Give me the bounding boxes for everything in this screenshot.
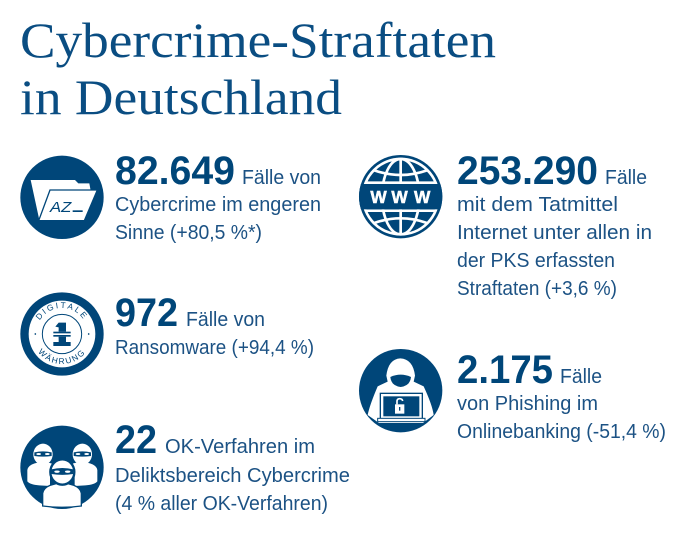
stat: 253.290 cases: Fälle bbox=[605, 167, 647, 189]
stat: 22 OK proceedings bbox=[115, 418, 350, 515]
title bbox=[20, 12, 496, 125]
icon: digital currency coin: WÄHRUNG bbox=[39, 348, 84, 364]
stat: 253.290 cases: der PKS erfassten bbox=[457, 250, 615, 272]
stat: 253.290 cases: 253.290 bbox=[457, 149, 598, 193]
stat: 22 OK proceedings: Deliktsbereich Cybercrime bbox=[115, 465, 350, 487]
stat: 82.649 cases: Cybercrime im engeren bbox=[115, 194, 321, 216]
icon: www globe: W bbox=[370, 187, 387, 207]
stat: 82.649 cases: 82.649 bbox=[115, 149, 235, 193]
stat: 22 OK proceedings: OK-Verfahren im bbox=[165, 436, 315, 458]
stat: 972 ransomware: 972 bbox=[115, 291, 178, 335]
stat: 2.175 phishing: von Phishing im bbox=[457, 393, 598, 415]
stat: 253.290 cases: Internet unter allen in bbox=[457, 222, 652, 244]
stat: 82.649 cases bbox=[115, 149, 321, 244]
stat: 2.175 phishing: Onlinebanking (-51,4 %) bbox=[457, 421, 666, 443]
stat: 82.649 cases: Sinne (+80,5 %*) bbox=[115, 222, 262, 244]
stat: 2.175 phishing: Fälle bbox=[560, 366, 602, 388]
icon: www globe: W bbox=[414, 187, 431, 207]
icon: www globe: W bbox=[391, 187, 408, 207]
stat: 253.290 cases: mit dem Tatmittel bbox=[457, 194, 618, 216]
title: in Deutschland bbox=[20, 69, 342, 125]
stat: 22 OK proceedings: (4 % aller OK-Verfahren) bbox=[115, 493, 328, 515]
stat: 972 ransomware bbox=[115, 291, 314, 359]
stat: 82.649 cases: Fälle von bbox=[242, 167, 321, 189]
icon: hacker with laptop bbox=[359, 349, 442, 432]
icon: digital currency coin bbox=[20, 292, 104, 376]
stat: 972 ransomware: Ransomware (+94,4 %) bbox=[115, 337, 314, 359]
icon: folder AZ: AZ bbox=[49, 200, 73, 216]
stat: 2.175 phishing: 2.175 bbox=[457, 348, 553, 392]
icon: masked group bbox=[20, 426, 104, 509]
stat: 253.290 cases: Straftaten (+3,6 %) bbox=[457, 278, 617, 300]
icon: digital currency coin: DIGITALE bbox=[36, 302, 88, 320]
stat: 22 OK proceedings: 22 bbox=[115, 418, 157, 462]
icon: www globe bbox=[358, 155, 443, 238]
stat: 972 ransomware: Fälle von bbox=[186, 309, 265, 331]
stat: 2.175 phishing bbox=[457, 348, 666, 443]
stat: 253.290 cases bbox=[457, 149, 652, 300]
title: Cybercrime-Straftaten bbox=[20, 12, 496, 68]
icon: folder AZ bbox=[20, 156, 104, 239]
